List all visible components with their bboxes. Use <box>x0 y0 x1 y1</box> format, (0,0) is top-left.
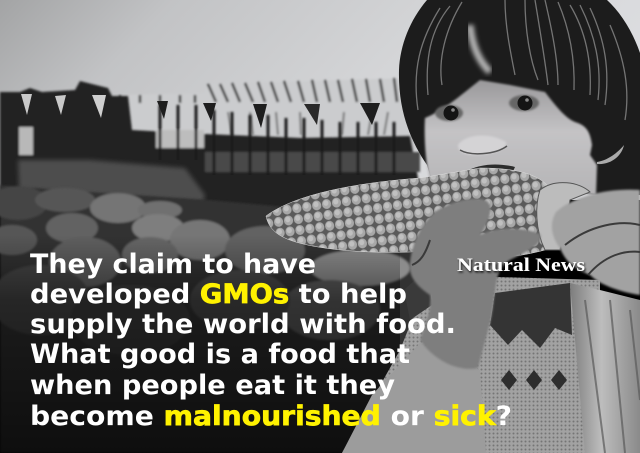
mouth <box>465 164 515 178</box>
finger creases <box>412 223 640 275</box>
line 3: supply the world with food. <box>30 309 456 340</box>
corn husk right <box>570 283 640 453</box>
nose <box>458 136 506 155</box>
sweater pattern band <box>490 283 572 348</box>
line 2: developed GMOs to help <box>30 279 407 310</box>
ear <box>597 145 624 164</box>
line 6: become malnourished or sick? <box>30 401 512 432</box>
dark treeline and fence band <box>0 81 425 215</box>
face <box>425 80 597 195</box>
bunting flags <box>21 94 380 128</box>
dark text backdrop shading <box>0 235 400 453</box>
watermark: Natural News: Natural News <box>457 255 585 276</box>
left eye <box>435 105 463 121</box>
right eye <box>509 95 539 111</box>
line 5: when people eat it they <box>30 370 395 401</box>
sweater diamonds <box>501 370 567 390</box>
sweater sleeve cuff <box>342 343 486 453</box>
corn cob <box>266 168 548 258</box>
corn husk tip <box>537 183 590 250</box>
hair <box>399 0 640 195</box>
pumpkin field <box>0 185 430 453</box>
right hand <box>552 190 640 295</box>
hay bales <box>18 160 205 215</box>
sky <box>0 0 640 200</box>
sweater <box>342 268 600 453</box>
boy eating corn <box>266 0 640 453</box>
line 4: What good is a food that <box>30 339 410 370</box>
central hand <box>410 199 540 369</box>
hair highlights <box>416 0 627 120</box>
headline quote <box>30 249 512 432</box>
line 1: They claim to have <box>30 249 316 280</box>
barn roof with stripes <box>110 78 420 150</box>
sleeve patterned shoulder <box>404 268 432 320</box>
